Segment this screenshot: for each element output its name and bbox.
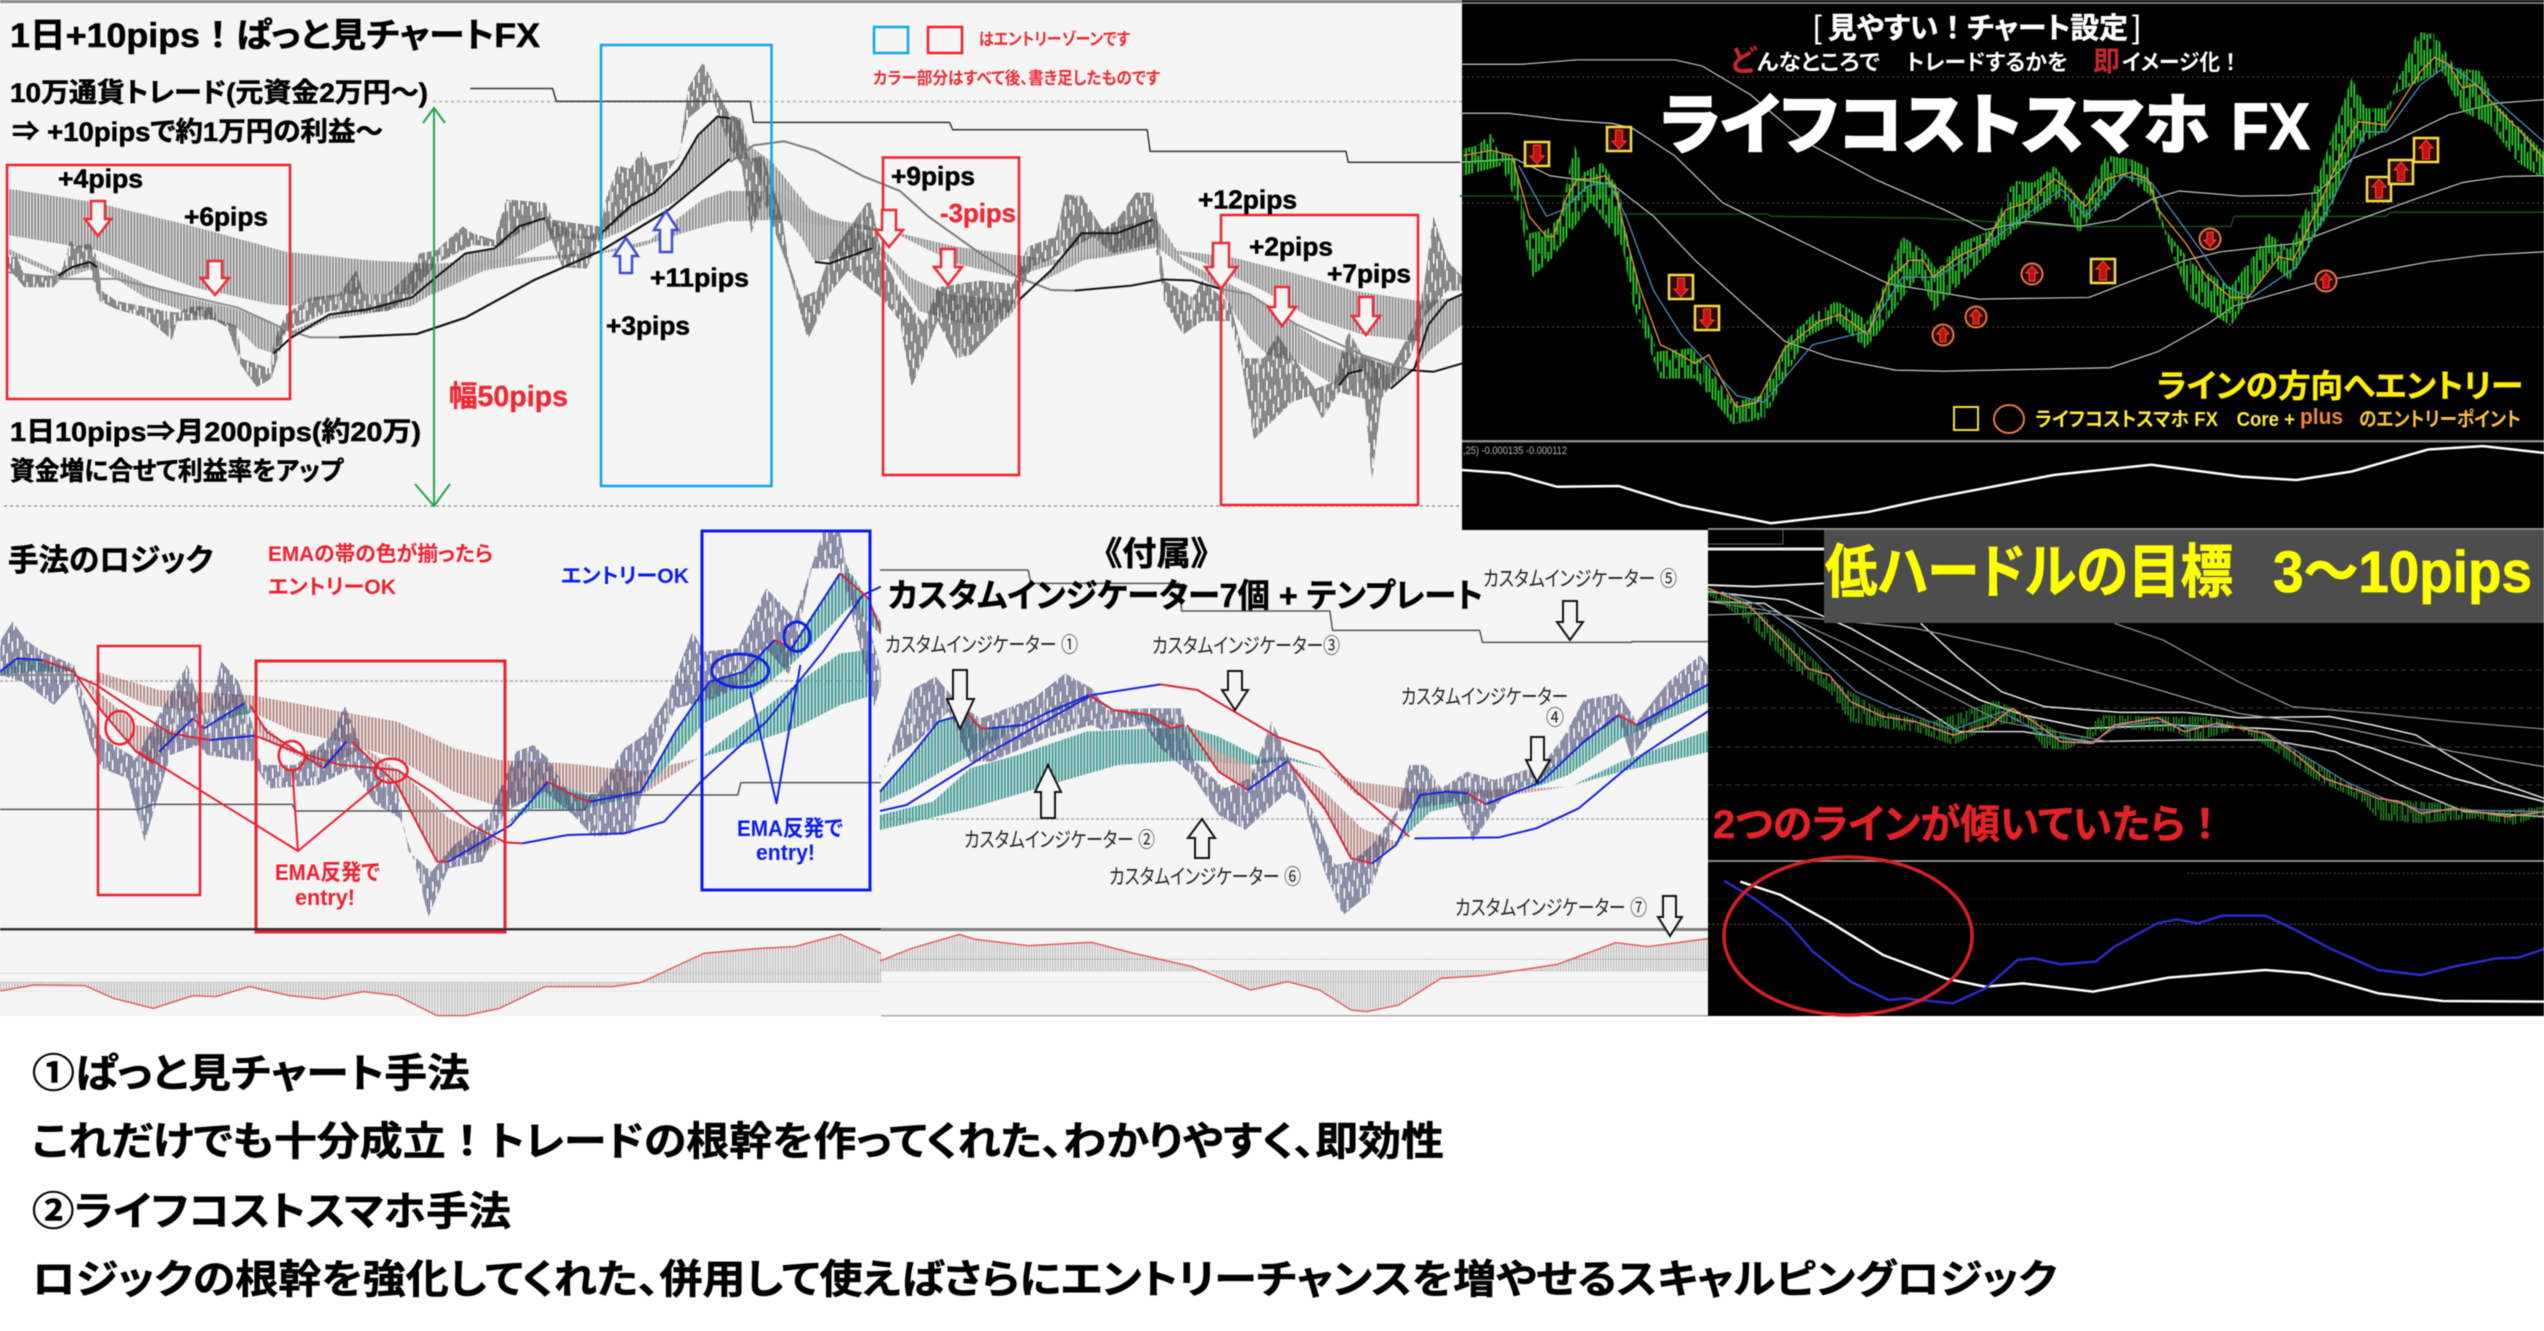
- red entry zone 1: [7, 165, 290, 399]
- label: +4pips: +4pips: [58, 164, 143, 194]
- label and arrow: indicator 1: [885, 634, 1078, 729]
- heading: カスタムインジケーター7個 + テンプレート: カスタムインジケーター7個 + テンプレート: [888, 577, 1483, 614]
- chart: candles and EMA bands, left part: [7, 63, 730, 387]
- annotations: red EMA rebound circles and pointers: [106, 711, 408, 851]
- heading: 見やすい チャート設定: 見やすい！チャート設定: [1828, 12, 2128, 45]
- red zone b: [256, 661, 505, 932]
- text block: summary: [32, 1052, 2057, 1302]
- red zone a: [98, 646, 200, 895]
- chart: candles and EMA bands, right part: [730, 101, 1463, 480]
- label and arrow: indicator 4: [1401, 686, 1568, 782]
- label and arrow: indicator 7: [1455, 896, 1682, 936]
- red label: EMA反発で entry: [275, 860, 380, 910]
- label: +6pips: +6pips: [184, 202, 268, 232]
- label: +3pips: +3pips: [606, 310, 690, 340]
- text block: summary: これだけでも十分成立 ！トレードの根幹を作ってくれた、わかりやすく、即効性: [32, 1120, 1444, 1164]
- label and arrow: indicator 4: カスタムインジケーター: [1401, 686, 1568, 709]
- label and arrow: indicator 4: ④: [1546, 707, 1564, 730]
- label and arrow: indicator 3: [1152, 635, 1340, 710]
- red circle highlight: [1724, 857, 1972, 1015]
- red note: EMAの帯の色が揃ったら: EMAの帯の色が揃ったら: [268, 542, 493, 566]
- green 50 pips range arrow: [415, 108, 450, 506]
- red down arrows: [85, 201, 1380, 335]
- title box: 低ハードルの目標 3〜10pips: 低ハードルの目標: [1825, 540, 2233, 605]
- heading: 見やすい チャート設定: ]: [2132, 9, 2141, 45]
- legend: entry point: [1954, 404, 2521, 433]
- entry markers: [1525, 127, 2438, 346]
- label: +9pips: +9pips: [891, 161, 975, 191]
- heading: 見やすい チャート設定: [: [1813, 9, 1822, 45]
- label: +11pips: +11pips: [650, 262, 749, 292]
- indicator values: ,25) -0.000135 -0.000112: [1463, 445, 1567, 457]
- legend: entry zone: はエントリーゾーンです: [979, 30, 1130, 49]
- callout: 2つのラインが傾いていたら: 2つのラインが傾いていたら！: [1713, 803, 2225, 847]
- label: -3pips: -3pips: [940, 198, 1016, 228]
- blue note: エントリーOK: エントリーOK: [561, 565, 689, 588]
- chart: EMA bands, lines and candles: [880, 570, 1710, 915]
- chart: green price and moving averages: [1708, 583, 2544, 825]
- text: +10pipsで約1万円の利益: ⇒ +10pipsで約1万円の利益〜: [12, 117, 383, 147]
- heading: 付属: 《付属》: [1105, 535, 1208, 572]
- label: +7pips: +7pips: [1327, 258, 1411, 288]
- sub heading: どんなところで: [1730, 45, 2241, 78]
- text: 1日10pips 月200pips: 1日10pips⇒月200pips(約20万): [10, 417, 421, 447]
- legend: entry zone: [874, 27, 1130, 53]
- divider: [0, 928, 881, 930]
- label and arrow: indicator 5: カスタムインジケーター ⑤: [1483, 568, 1677, 591]
- label: +2pips: +2pips: [1249, 232, 1333, 262]
- label and arrow: indicator 3: カスタムインジケーター③: [1152, 635, 1340, 658]
- blue label: EMA反発で entry: [737, 816, 843, 865]
- divider: sub chart: [1708, 860, 2544, 862]
- blue zone: [702, 531, 870, 890]
- main title: FX: [2231, 89, 2310, 163]
- blue label: EMA反発で entry: entry!: [756, 840, 815, 865]
- title box: 低ハードルの目標 3〜10pips: 3〜10pips: [2273, 540, 2532, 605]
- heading: 手法のロジック: 手法のロジック: [8, 543, 213, 578]
- panel: 付属 カスタムインジケーター: [880, 530, 1710, 1016]
- callout: ラインの方向へエントリー: ラインの方向へエントリー: [2157, 368, 2523, 404]
- blue label: EMA反発で entry: EMA反発で: [737, 816, 843, 841]
- panel: 低ハードルの目標 chart: [1708, 528, 2544, 1016]
- text block: summary: ロジックの根幹を強化してくれた、併用して使えばさらにエントリーチャンスを増やせるスキャルピングロジック: [32, 1258, 2057, 1302]
- label and arrow: indicator 2: カスタムインジケーター ②: [964, 829, 1155, 852]
- panel: ライフコストスマホ FX chart: [1460, 0, 2544, 530]
- red label: EMA反発で entry: EMA反発で: [275, 860, 380, 885]
- sub chart: indicator 7 oscillator: [880, 934, 1710, 1012]
- label and arrow: indicator 6: [1109, 819, 1301, 889]
- title: 1日+10pips ！ぱっと見チャートFX: [10, 17, 540, 55]
- text block: summary: ①ぱっと見チャート手法: [32, 1052, 470, 1096]
- red entry zone 2: [883, 158, 1019, 475]
- divider: sub chart: [1462, 440, 2544, 442]
- blue up arrows: [614, 211, 678, 273]
- chart: green price and MA lines: [1460, 32, 2544, 523]
- text block: summary: ②ライフコストスマホ手法: [32, 1190, 511, 1234]
- text: 資金増に合せて利益率をアップ: 資金増に合せて利益率をアップ: [10, 456, 344, 486]
- sub heading: どんなところで: トレードするかを: [1906, 50, 2068, 75]
- label and arrow: indicator 1: カスタムインジケーター ①: [885, 634, 1078, 657]
- sub chart: oscillator: [0, 934, 881, 1016]
- legend: entry point: plus: [2300, 404, 2343, 429]
- legend: entry point: ライフコストスマホ FX Core +: [2035, 409, 2295, 431]
- blue entry zone: [601, 45, 772, 486]
- label: +12pips: +12pips: [1198, 184, 1297, 214]
- red label: EMA反発で entry: entry!: [295, 885, 355, 910]
- chart: EMA bands, lines and candles: [0, 532, 881, 917]
- note: カラー部分: カラー部分はすべて後、書き足したものです: [873, 68, 1160, 88]
- red entry zone 3: [1221, 215, 1418, 505]
- sub heading: どんなところで: ど: [1730, 45, 1758, 78]
- label and arrow: indicator 2: [964, 765, 1155, 852]
- annotations: blue EMA rebound circles and pointers: [712, 622, 810, 803]
- main title: ライフコストスマホ: [1660, 88, 2210, 162]
- red note: エントリーOK: エントリーOK: [268, 576, 396, 599]
- panel: ぱっと見チャートFX: [0, 0, 1463, 530]
- sub heading: どんなところで: んなところで: [1757, 50, 1880, 75]
- legend: entry point: のエントリーポイント: [2359, 408, 2521, 431]
- label and arrow: indicator 5: [1483, 568, 1677, 640]
- text: 10万通貨トレード: 10万通貨トレード(元資金2万円〜): [10, 78, 428, 108]
- label and arrow: indicator 7: カスタムインジケーター ⑦: [1455, 897, 1647, 920]
- divider: [881, 928, 1708, 931]
- sub heading: どんなところで: イメージ化！: [2122, 50, 2241, 75]
- sub chart: blue and white lines: [1708, 873, 2544, 1003]
- label: 幅50pips: 幅50pips: [449, 380, 568, 413]
- panel: 手法のロジック: [0, 530, 881, 1016]
- title box: 低ハードルの目標 3〜10pips: [1824, 530, 2544, 623]
- sub heading: どんなところで: 即: [2093, 46, 2120, 77]
- label and arrow: indicator 6: カスタムインジケーター ⑥: [1109, 866, 1301, 889]
